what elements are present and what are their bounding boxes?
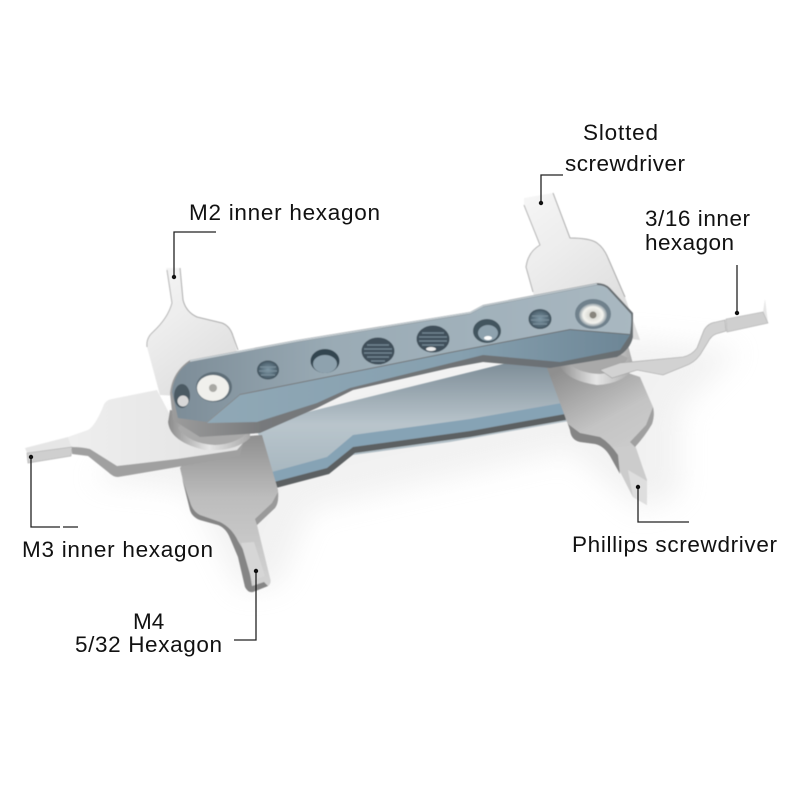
callout: M2 inner hexagon: M2 inner hexagon <box>189 200 380 225</box>
tool: M3 hexagon blade <box>25 390 243 477</box>
bar outline and lower chamfer <box>170 283 633 437</box>
callout: Phillips screwdriver <box>572 485 778 557</box>
callout: 3/16 inner hexagon <box>645 206 750 315</box>
callout: M3 inner hexagon: M3 inner hexagon <box>22 537 213 562</box>
right pivot disc <box>558 345 634 385</box>
threaded hole 4 <box>416 326 450 352</box>
callout: M4 5/32 Hexagon <box>75 569 258 657</box>
tool: 3/16 hexagon blade <box>600 299 768 378</box>
callout: M4 5/32 Hexagon: 5/32 Hexagon <box>75 632 222 657</box>
tool: Phillips screwdriver blade <box>547 360 654 505</box>
central body <box>255 350 575 488</box>
plain hole 2 <box>310 349 340 373</box>
callout: Phillips screwdriver: Phillips screwdriver <box>572 532 778 557</box>
bar front face <box>207 330 630 423</box>
callout: M3 inner hexagon <box>22 455 213 562</box>
bar highlight <box>190 284 597 361</box>
bar top face <box>172 285 631 422</box>
plain hole 5 <box>473 319 501 343</box>
callout: M2 inner hexagon <box>172 200 380 279</box>
left pivot disc <box>168 410 250 450</box>
callout: 3/16 inner hexagon: 3/16 inner <box>645 206 750 231</box>
threaded hole 6 <box>528 309 552 329</box>
callout: Slotted screwdriver: screwdriver <box>565 151 686 176</box>
tool: M2 hexagon blade <box>147 268 250 400</box>
threaded hole 1 <box>257 360 279 380</box>
callout: Slotted screwdriver: Slotted <box>583 120 658 145</box>
product artwork <box>25 193 768 592</box>
callout: Slotted screwdriver <box>539 120 686 205</box>
callout: 3/16 inner hexagon: hexagon <box>645 230 734 255</box>
threaded hole 3 <box>362 338 394 364</box>
right hex screw <box>575 299 611 329</box>
callout: M4 5/32 Hexagon: M4 <box>133 609 164 634</box>
left hex screw <box>196 372 232 402</box>
aluminium bar <box>170 283 633 437</box>
tool: slotted screwdriver blade <box>524 193 640 340</box>
tool: M4 5/32 hexagon blade <box>180 435 278 592</box>
small side hole <box>174 384 190 408</box>
soft shadow <box>90 340 740 590</box>
